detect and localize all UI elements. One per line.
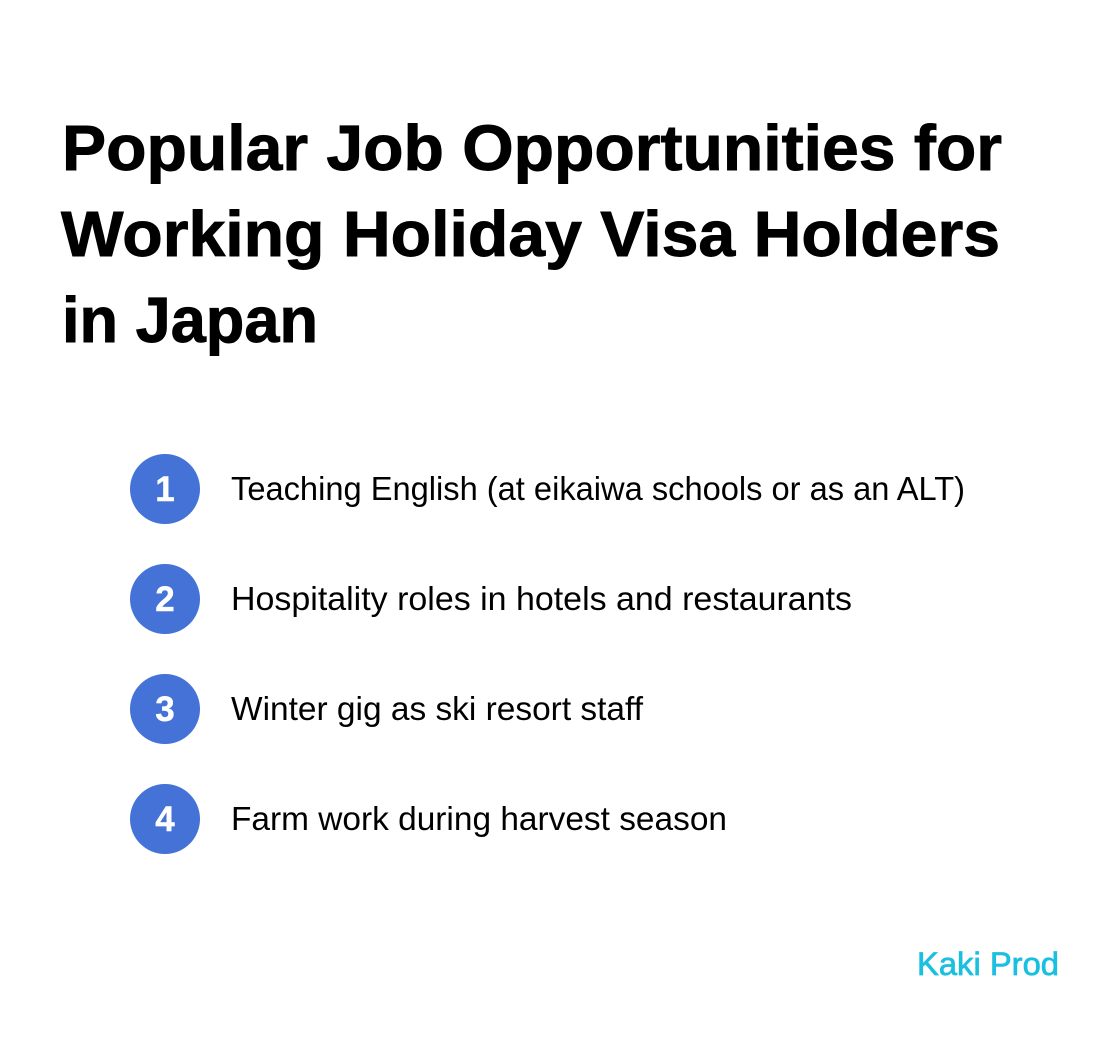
- list item 4: 4: [155, 800, 175, 839]
- list item 2: 2: [155, 580, 175, 619]
- title: in Japan: [62, 284, 318, 356]
- title: Working Holiday Visa Holders: [61, 198, 1000, 270]
- list item 4: Farm work during harvest season: [231, 801, 727, 838]
- list item 2: [130, 564, 852, 634]
- list item 1: Teaching English (at eikaiwa schools or as an ALT): [231, 471, 965, 508]
- list of job opportunities: [130, 454, 965, 854]
- title: Popular Job Opportunities for: [62, 112, 1002, 184]
- list item 3: [130, 674, 644, 744]
- logo: Kaki Prod: Kaki Prod: [917, 946, 1059, 982]
- list item 4: [130, 784, 727, 854]
- title: [61, 112, 1002, 356]
- list item 3: 3: [155, 690, 175, 729]
- list item 3: Winter gig as ski resort staff: [231, 691, 644, 728]
- list item 2: Hospitality roles in hotels and restaurants: [231, 581, 852, 618]
- list item 1: [130, 454, 965, 524]
- list item 1: 1: [155, 470, 175, 509]
